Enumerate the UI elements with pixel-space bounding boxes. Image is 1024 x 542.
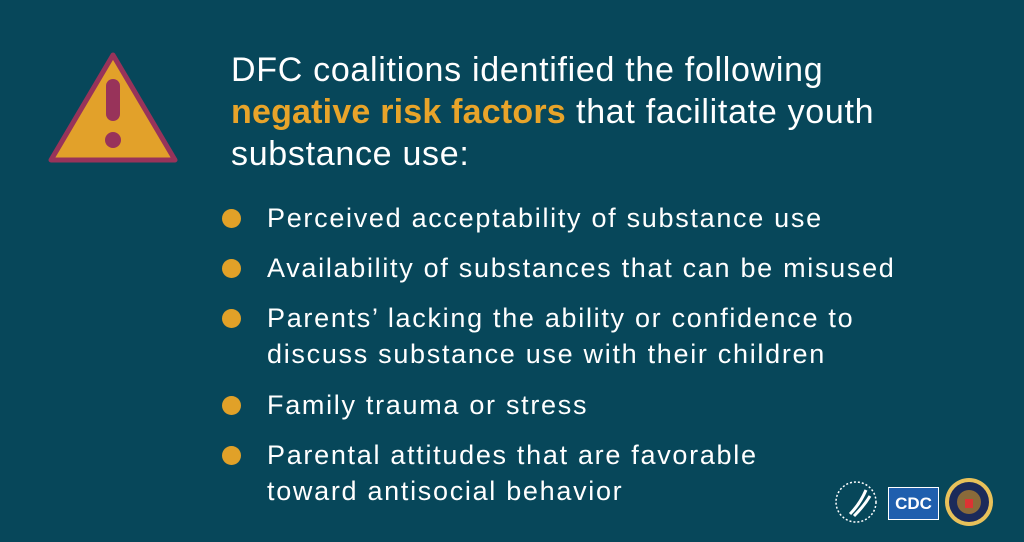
bullet list: [222, 203, 896, 506]
bullet list: Availability of substances that can be misused: [267, 253, 896, 283]
bullet 2: [222, 253, 896, 283]
bullet list: Perceived acceptability of substance use: [267, 203, 823, 233]
bullet list: Family trauma or stress: [267, 390, 588, 420]
logo: CDC: [888, 487, 939, 520]
title: substance use:: [231, 135, 470, 173]
title: DFC coalitions identified the following: [231, 51, 823, 89]
logos: [835, 478, 993, 526]
logo: HHS: [835, 481, 877, 523]
bullet list: toward antisocial behavior: [267, 476, 623, 506]
bullet 1: [222, 203, 823, 233]
bullet list: Parents’ lacking the ability or confidence to: [267, 303, 854, 333]
bullet 4: [222, 390, 588, 420]
logo: CDC: CDC: [895, 494, 932, 513]
bullet list: discuss substance use with their children: [267, 339, 826, 369]
icon: warning triangle: [48, 52, 178, 162]
bullet 5: [222, 440, 758, 506]
bullet list: Parental attitudes that are favorable: [267, 440, 758, 470]
title: [231, 51, 874, 173]
logo: ONDCP seal: [945, 478, 993, 526]
title: negative risk factors that facilitate youth: [231, 93, 874, 131]
bullet 3: [222, 303, 854, 369]
